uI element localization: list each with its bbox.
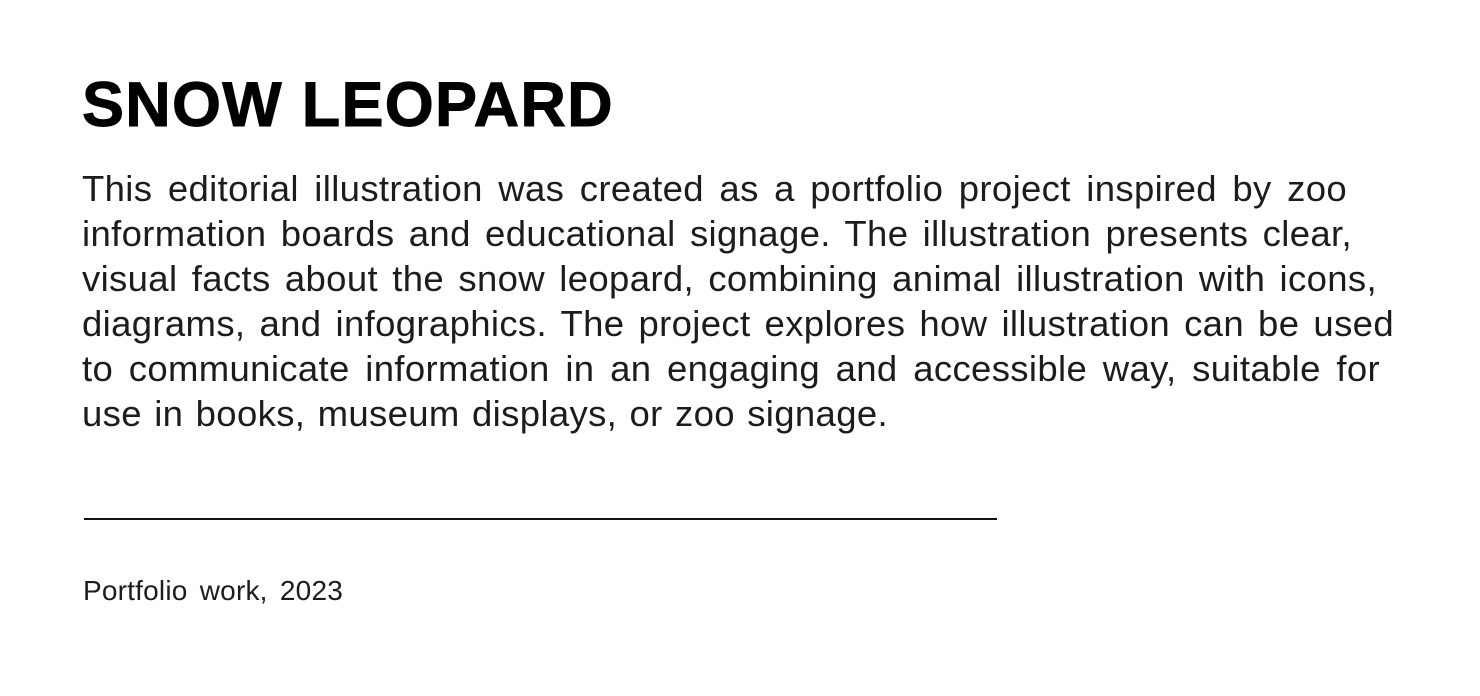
body text block: information boards and educational signage. The illustration presents clear, xyxy=(82,213,1352,254)
footer caption: Portfolio work, 2023 xyxy=(83,575,343,606)
body text block: This editorial illustration was created as a portfolio project inspired by zoo xyxy=(82,168,1347,209)
divider line xyxy=(84,518,997,520)
body text block: visual facts about the snow leopard, combining animal illustration with icons, xyxy=(82,258,1377,299)
body text block: to communicate information in an engaging and accessible way, suitable for xyxy=(82,348,1380,389)
body text block: use in books, museum displays, or zoo signage. xyxy=(82,393,888,434)
title: SNOW LEOPARD xyxy=(82,70,614,140)
body text block: diagrams, and infographics. The project explores how illustration can be used xyxy=(82,303,1394,344)
body text block xyxy=(82,168,1394,434)
